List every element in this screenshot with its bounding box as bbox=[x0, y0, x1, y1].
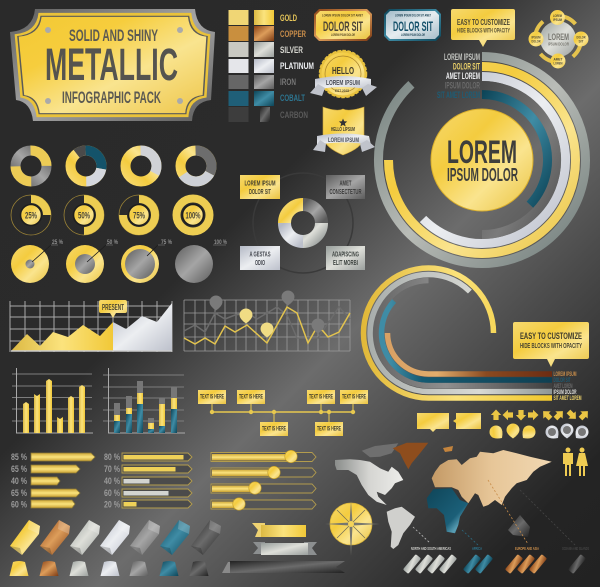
radial bar chart bbox=[378, 56, 585, 264]
badge: hello round: EST 2015 bbox=[335, 88, 350, 93]
outlined progress arrows: 40 % bbox=[104, 476, 120, 486]
title main word: METALLIC bbox=[45, 39, 178, 90]
world map bbox=[335, 443, 575, 549]
swatch labels: COPPER bbox=[280, 29, 306, 40]
badge: hello round: HELLO bbox=[332, 65, 354, 77]
progress rings row bbox=[11, 195, 210, 235]
large bullion bars bbox=[10, 520, 221, 555]
timeline bbox=[198, 390, 368, 436]
map: south america bbox=[387, 507, 415, 549]
cycle diagram: LOREM bbox=[553, 13, 562, 18]
outlined progress arrows bbox=[104, 452, 192, 510]
metal colour swatches bbox=[228, 10, 314, 122]
swatch labels: PLATINUM bbox=[280, 61, 314, 72]
radial chart labels: DOLOR SIT bbox=[453, 62, 480, 72]
arc: silver bbox=[370, 275, 552, 392]
solid progress arrows: 85 % bbox=[11, 452, 27, 462]
present marker: PRESENT bbox=[102, 303, 124, 312]
label: adapiscing elit morbi: ADAPISCING bbox=[332, 250, 359, 258]
cycle diagram: SIT bbox=[578, 38, 584, 44]
outlined progress arrows: 70 % bbox=[104, 464, 120, 474]
label: amet consectetur: CONSECTETUR bbox=[330, 187, 362, 196]
gauge discs row: 100 % bbox=[214, 239, 227, 246]
solid progress arrows: 60 % bbox=[11, 500, 27, 510]
badge: hello round: LOREM IPSUM bbox=[326, 80, 360, 87]
ring: dolor sit bbox=[388, 66, 576, 254]
cycle diagram: IPSUM bbox=[532, 34, 541, 40]
ring: lorem ipsum bbox=[378, 56, 585, 264]
people icons bbox=[563, 448, 588, 476]
map: australia bbox=[508, 515, 530, 537]
badge: gold dolor sit: LOREM IPSUM DOLOR bbox=[331, 33, 355, 37]
gauge discs row: 50 % bbox=[107, 239, 118, 246]
timeline: TEXT IS HERE bbox=[239, 394, 263, 400]
progress rings row: 50% bbox=[78, 210, 90, 220]
small bullion ingots bbox=[10, 561, 208, 576]
arrow icons bbox=[491, 407, 592, 423]
label: lorem ipsum dolor sit: LOREM IPSUM bbox=[244, 178, 276, 188]
radial chart centre disc: IPSUM DOLOR bbox=[447, 165, 518, 185]
cycle diagram: LOREM bbox=[548, 32, 569, 43]
map legend labels: EUROPE AND ASIA bbox=[515, 546, 539, 551]
arc chart labels: LOREM IPSUM bbox=[554, 372, 576, 378]
cycle diagram bbox=[528, 10, 588, 68]
map: arctic islands bbox=[362, 443, 398, 457]
arc chart labels: IPSUM DOLOR bbox=[554, 390, 577, 396]
badge: silver dolor sit: LOREM IPSUM DOLOR bbox=[401, 33, 425, 37]
radial chart labels: AMET LOREM bbox=[446, 71, 480, 81]
gauge discs row: 75 % bbox=[161, 239, 172, 246]
radial chart centre disc bbox=[431, 109, 533, 211]
badge: silver dolor sit bbox=[384, 9, 441, 41]
swatch labels: IRON bbox=[280, 77, 296, 88]
badge: hello round bbox=[310, 50, 377, 98]
swatch labels: GOLD bbox=[280, 13, 297, 24]
outlined progress arrows: 20 % bbox=[104, 500, 120, 510]
badge: gold dolor sit: DOLOR SIT bbox=[323, 18, 363, 34]
label: adapiscing elit morbi bbox=[326, 246, 365, 270]
swatch labels: COBALT bbox=[280, 93, 305, 104]
radial chart labels: LOREM IPSUM bbox=[444, 52, 480, 62]
map legend labels: NORTH AND SOUTH AMERICAS bbox=[411, 546, 451, 551]
label: a gestas odio: A GESTAS bbox=[250, 250, 270, 258]
map: north america bbox=[335, 459, 403, 505]
badge: shield: HELLO LIPSUM bbox=[331, 127, 355, 133]
ring: sit amet lorem bbox=[482, 94, 548, 205]
radial chart centre disc: LOREM bbox=[447, 134, 517, 170]
arc: cobalt bbox=[382, 301, 552, 380]
badge: shield: LOREM IPSUM bbox=[328, 137, 359, 144]
map: greenland bbox=[393, 443, 428, 469]
radial chart labels: SIT AMET LOREM bbox=[437, 90, 480, 100]
map: leader lines bbox=[413, 480, 575, 545]
map legend labels: AFRICA bbox=[472, 546, 482, 551]
central donut with labels bbox=[240, 173, 365, 273]
callout: easy to customize (top): HIDE BLOCKS WITH OPACITY bbox=[457, 28, 510, 34]
cycle diagram: DOLOR bbox=[576, 34, 586, 40]
pin icons bbox=[487, 423, 591, 443]
progress rings row: 100% bbox=[186, 210, 200, 220]
callout: easy to customize (top) bbox=[451, 9, 515, 47]
line chart with pins bbox=[184, 290, 350, 351]
label: lorem ipsum dolor sit: DOLOR SIT bbox=[249, 187, 271, 196]
sliders bbox=[211, 450, 316, 510]
cycle diagram: IPSUM DOLOR bbox=[548, 42, 569, 46]
timeline: TEXT IS HERE bbox=[317, 426, 341, 432]
ribbon: dark long bbox=[222, 561, 345, 573]
swatch labels bbox=[280, 13, 314, 121]
arc bar chart with tails bbox=[364, 268, 552, 398]
timeline: TEXT IS HERE bbox=[342, 394, 366, 400]
solid progress arrows: 65 % bbox=[11, 488, 27, 498]
map legend labels bbox=[411, 546, 589, 551]
solid progress arrows: 40 % bbox=[11, 476, 27, 486]
progress rings row: 75% bbox=[133, 210, 145, 220]
badge: gold dolor sit: LOREM IPSUM DOLOR SIT AMET bbox=[322, 14, 364, 18]
timeline: TEXT IS HERE bbox=[200, 394, 224, 400]
donut row 1 bbox=[16, 150, 212, 182]
label: amet consectetur bbox=[326, 175, 365, 199]
compass bbox=[325, 501, 380, 556]
timeline: TEXT IS HERE bbox=[262, 426, 286, 432]
arc chart labels bbox=[554, 372, 582, 402]
bar chart: stacked cobalt, gold and iron bbox=[103, 368, 185, 433]
solid progress arrows bbox=[11, 452, 95, 510]
cycle diagram: LOREM bbox=[554, 60, 563, 66]
badge: shield bbox=[313, 107, 375, 155]
radial chart labels bbox=[437, 52, 480, 100]
label: amet consectetur: AMET bbox=[340, 178, 352, 188]
ribbon: gold bbox=[252, 523, 306, 537]
badge: silver dolor sit: LOREM IPSUM DOLOR SIT AMET bbox=[395, 14, 432, 18]
map: europe and asia bbox=[432, 450, 552, 507]
outlined progress arrows: 80 % bbox=[104, 452, 120, 462]
cycle diagram: IPSUM bbox=[553, 17, 562, 22]
title plaque bbox=[10, 9, 215, 121]
area chart bbox=[10, 300, 172, 352]
arc: iron bbox=[376, 280, 552, 386]
timeline: TEXT IS HERE bbox=[309, 394, 333, 400]
label: a gestas odio bbox=[240, 246, 280, 270]
arc: copper bbox=[388, 333, 552, 374]
badge: silver dolor sit: DOLOR SIT bbox=[393, 18, 433, 34]
bar chart: gold bbox=[12, 368, 93, 433]
swatch labels: CARBON bbox=[280, 110, 308, 121]
solid progress arrows: 65 % bbox=[11, 464, 27, 474]
title line 1: SOLID AND SHINY bbox=[69, 26, 158, 45]
gauge discs row: 25 % bbox=[52, 239, 63, 246]
ring: amet lorem bbox=[423, 76, 566, 243]
gold speech boxes bbox=[417, 413, 481, 432]
radial chart labels: IPSUM DOLOR bbox=[445, 80, 480, 90]
cycle diagram: DOLOR bbox=[532, 38, 541, 44]
present marker bbox=[99, 300, 127, 318]
map legend mini bars bbox=[403, 554, 586, 574]
swatch labels: SILVER bbox=[280, 45, 303, 56]
ribbon: silver bbox=[253, 542, 317, 555]
label: lorem ipsum dolor sit bbox=[240, 175, 280, 199]
badge: gold dolor sit bbox=[314, 9, 372, 41]
label: a gestas odio: ODIO bbox=[255, 258, 265, 267]
arc chart labels: AMET LOREM bbox=[554, 384, 572, 390]
arc: gold bbox=[364, 268, 552, 398]
map: iceland bbox=[443, 446, 453, 452]
callout: easy to customize (lower) bbox=[513, 322, 589, 367]
label: adapiscing elit morbi: ELIT MORBI bbox=[333, 258, 358, 267]
cycle diagram: AMET bbox=[554, 56, 563, 62]
gauge discs row bbox=[11, 239, 227, 283]
map: africa bbox=[427, 488, 468, 533]
callout: easy to customize (top): EASY TO CUSTOMIZE bbox=[457, 17, 510, 27]
progress rings row: 25% bbox=[25, 210, 37, 220]
ribbons bbox=[222, 523, 345, 573]
outlined progress arrows: 60 % bbox=[104, 488, 120, 498]
title line 3: INFOGRAPHIC PACK bbox=[62, 88, 161, 107]
arc chart labels: DOLOR SIT bbox=[554, 378, 571, 384]
ring: ipsum dolor bbox=[482, 86, 556, 234]
